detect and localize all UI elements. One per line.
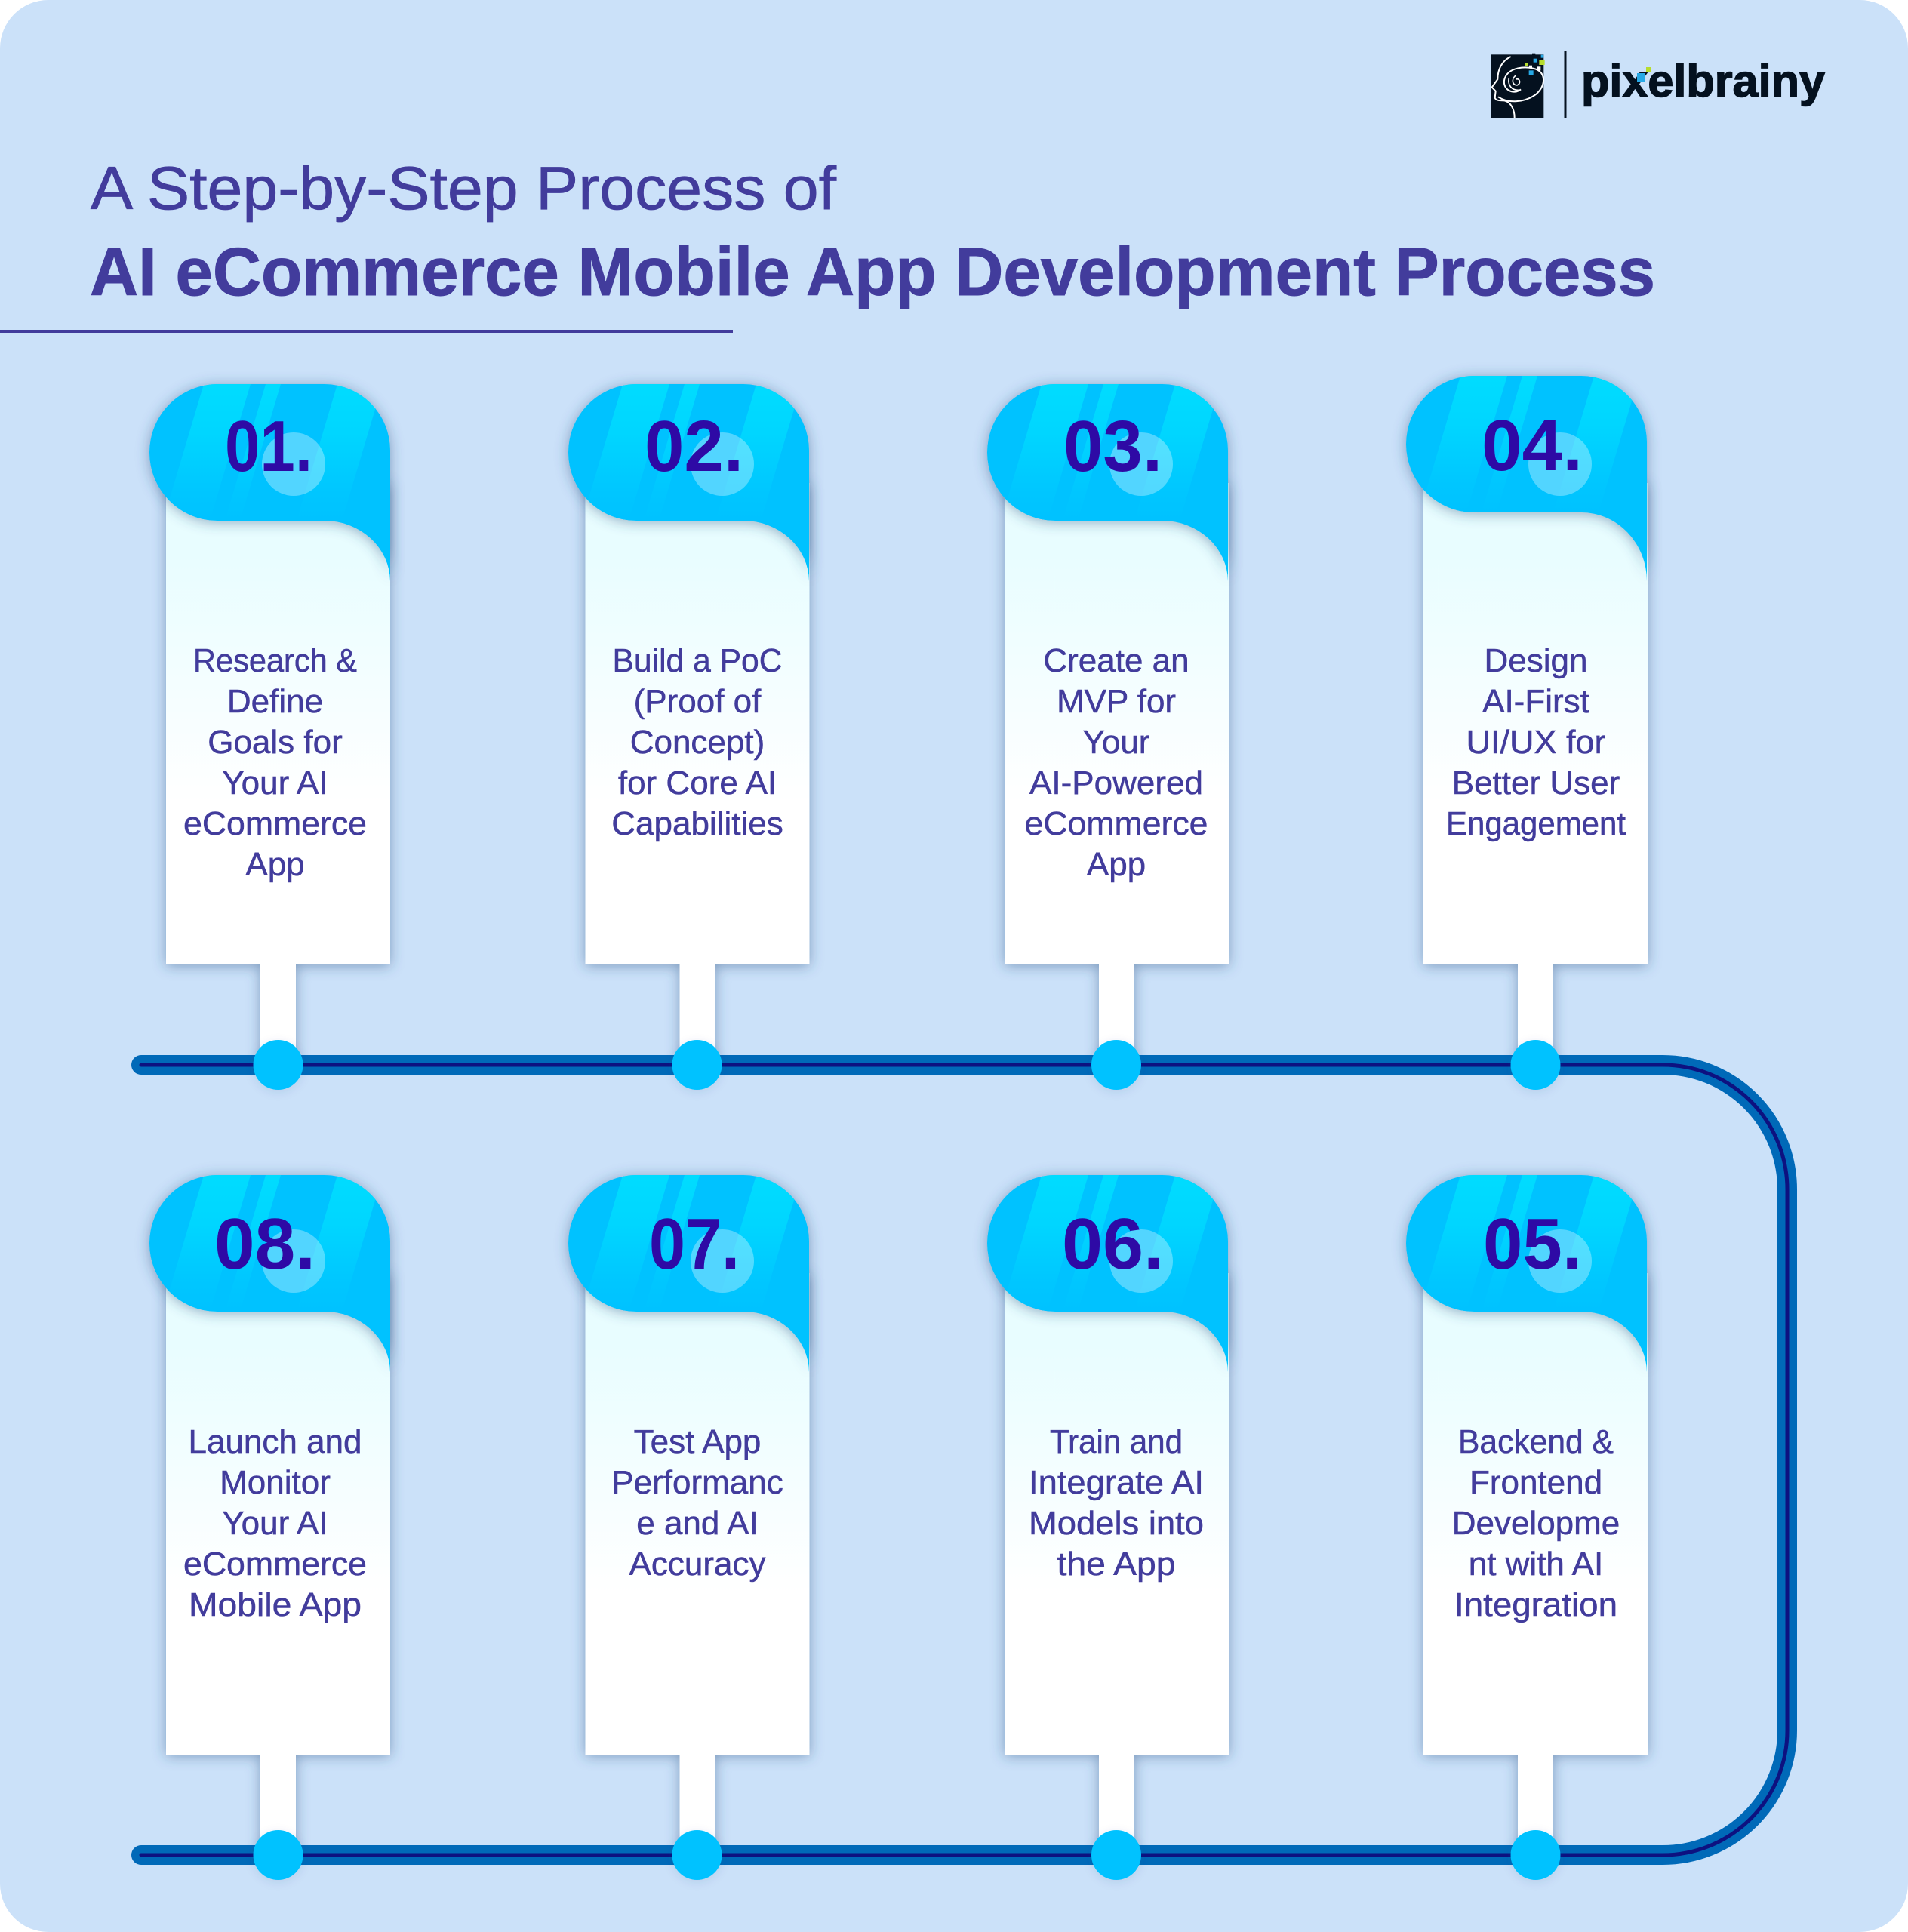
step 08 text: Your AI	[222, 1505, 328, 1542]
title line 1: A Step-by-Step Process of	[91, 155, 837, 223]
step 07 header: 07.	[649, 1204, 740, 1284]
step 06 text: Models into	[1029, 1505, 1204, 1542]
step 07 text: Accuracy	[629, 1546, 765, 1583]
step 06 header: 06.	[1062, 1204, 1164, 1284]
step 01 text: Research &	[193, 642, 357, 679]
step 03 text: eCommerce	[1025, 805, 1208, 842]
step 01 header	[149, 384, 390, 581]
step 01 card body	[166, 483, 390, 1065]
step 04 text: UI/UX for	[1466, 724, 1606, 761]
timeline nodes	[254, 1040, 1561, 1880]
step 07 text: e and AI	[636, 1505, 759, 1542]
step 02 text: Build a PoC	[613, 642, 782, 679]
step 03 text: App	[1087, 846, 1146, 883]
step 02 text: (Proof of	[634, 683, 762, 720]
step 05 text: Backend &	[1458, 1423, 1614, 1460]
step 05 text: nt with AI	[1469, 1546, 1603, 1583]
step 04 card body	[1423, 483, 1648, 1065]
step 03 text	[1025, 642, 1208, 883]
timeline path	[141, 1065, 1787, 1855]
step 05 text	[1452, 1423, 1620, 1623]
step 02 header	[568, 384, 809, 581]
step 07 header	[568, 1175, 809, 1372]
step 08 card body	[166, 1273, 390, 1855]
step 07 text: Performanc	[611, 1464, 783, 1501]
step 01 text: Your AI	[222, 764, 328, 801]
step 03 text: Your	[1083, 724, 1149, 761]
step 03 card body	[1005, 483, 1229, 1065]
step 02 card body	[586, 483, 809, 1065]
step 01 text: Goals for	[208, 724, 343, 761]
step 01 text	[183, 642, 367, 883]
step 01 text: App	[245, 846, 305, 883]
title line 2: AI eCommerce Mobile App Development Process	[90, 235, 1655, 310]
logo: pixelbrainy	[1491, 51, 1826, 118]
step 03 header: 03.	[1063, 406, 1162, 487]
step 06 text: Train and	[1050, 1423, 1183, 1460]
step 05 text: Integration	[1454, 1586, 1617, 1623]
step 05 header: 05.	[1483, 1204, 1582, 1284]
step 03 text: AI-Powered	[1029, 764, 1203, 801]
step 05 header	[1406, 1175, 1647, 1372]
step 07 text: Test App	[634, 1423, 761, 1460]
step 08 header: 08.	[214, 1204, 315, 1284]
step 01 header: 01.	[225, 406, 312, 487]
step 04 header: 04.	[1482, 405, 1583, 486]
step 07 card body	[586, 1273, 809, 1855]
step 08 text: Launch and	[189, 1423, 362, 1460]
step 02 text: Capabilities	[611, 805, 783, 842]
step 07 text	[611, 1423, 783, 1583]
step 06 text: Integrate AI	[1029, 1464, 1204, 1501]
step 01 text: Define	[227, 683, 323, 720]
wordmark: pixelbrainy	[1581, 56, 1826, 106]
step 08 text	[183, 1423, 367, 1623]
step 06 header	[987, 1175, 1228, 1372]
step 03 header	[987, 384, 1228, 581]
step 03 text: MVP for	[1057, 683, 1176, 720]
step 08 header	[149, 1175, 390, 1372]
step 02 header: 02.	[645, 406, 743, 487]
step 04 text: Engagement	[1446, 805, 1626, 842]
step 08 text: Monitor	[220, 1464, 331, 1501]
step 05 text: Frontend	[1469, 1464, 1602, 1501]
step 04 text: Better User	[1452, 764, 1620, 801]
icon: head with spiral	[1491, 54, 1545, 118]
step 02 text: Concept)	[630, 724, 765, 761]
step 08 text: eCommerce	[183, 1546, 367, 1583]
step 04 text: Design	[1485, 642, 1587, 679]
step 02 text: for Core AI	[618, 764, 777, 801]
step 06 text	[1029, 1423, 1204, 1583]
step 08 text: Mobile App	[189, 1586, 362, 1623]
step 04 text: AI-First	[1482, 683, 1589, 720]
step 06 card body	[1005, 1273, 1229, 1855]
step 06 text: the App	[1057, 1546, 1176, 1583]
step 03 text: Create an	[1043, 642, 1189, 679]
step 05 card body	[1423, 1273, 1648, 1855]
title	[90, 155, 1655, 310]
step 02 text	[611, 642, 783, 842]
step 01 text: eCommerce	[183, 805, 367, 842]
step 04 text	[1446, 642, 1626, 842]
step 05 text: Developme	[1452, 1505, 1620, 1542]
step 04 header	[1406, 376, 1647, 581]
